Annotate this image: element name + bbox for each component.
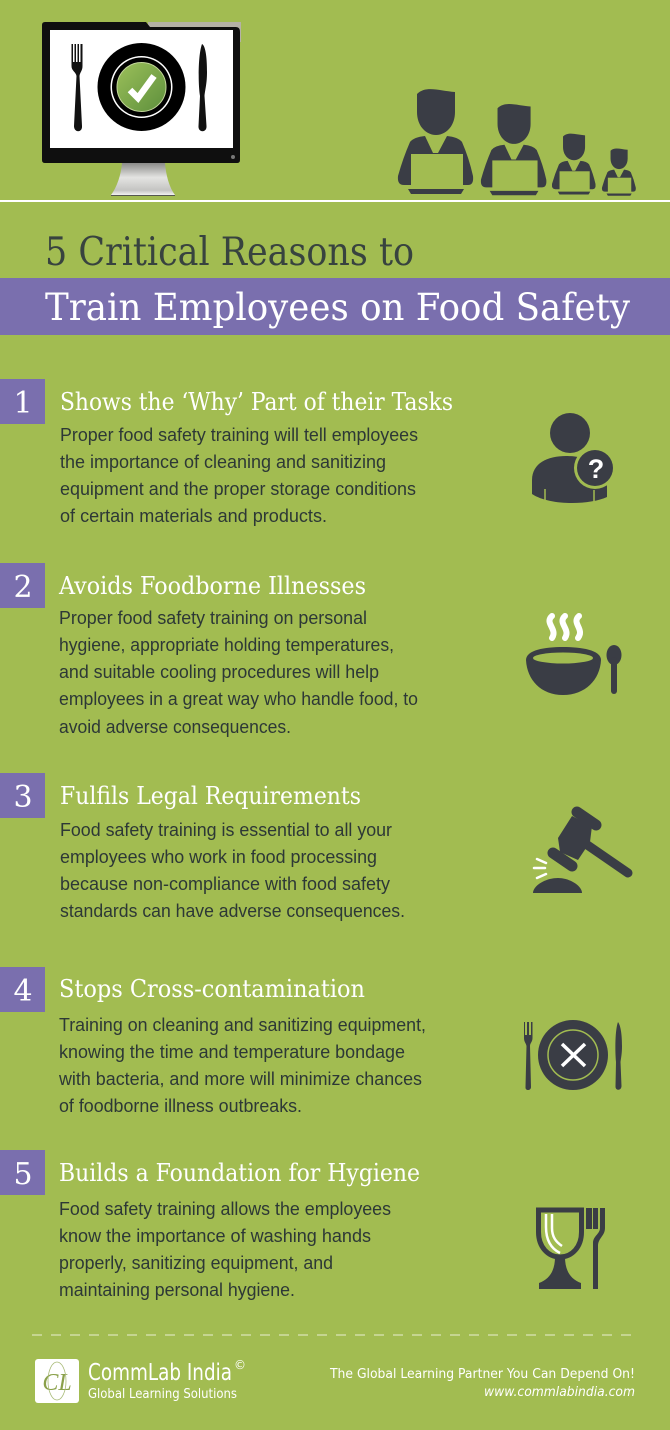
body text 2: hygiene, appropriate holding temperatures, (59, 635, 394, 655)
logo: CommLab India: CommLab India (88, 1360, 232, 1386)
panel: reason 1 (0, 379, 616, 526)
body text 5: Food safety training allows the employees (59, 1199, 391, 1219)
logo: CommLab India: © (234, 1358, 246, 1372)
employee 2 (481, 104, 546, 195)
panel: reason 4 (0, 967, 622, 1116)
icon: plate with cross, fork and knife (524, 1020, 622, 1090)
body text 3: because non-compliance with food safety (60, 874, 390, 894)
body text 2: and suitable cooling procedures will help (59, 662, 379, 682)
number badge 5 (0, 1150, 45, 1195)
body text 3: Food safety training is essential to all your (60, 820, 392, 840)
heading 4: Stops Cross-contamination (59, 975, 365, 1003)
number badge 2 (0, 563, 45, 608)
icon: knife (198, 44, 207, 131)
body text 3 (60, 820, 405, 921)
body text 3: employees who work in food processing (60, 847, 377, 867)
body text 4 (58, 1015, 426, 1116)
icon: four employees at laptops (398, 89, 636, 196)
body text 2: Proper food safety training on personal (59, 608, 367, 628)
panel: reason 3 (0, 773, 628, 921)
body text 2: avoid adverse consequences. (59, 717, 291, 737)
icon: gavel (533, 812, 628, 893)
icon: fork (72, 44, 82, 131)
number badge 4: 4 (13, 974, 33, 1009)
body text 4: knowing the time and temperature bondage (59, 1042, 405, 1062)
body text 5 (59, 1199, 391, 1300)
icon: steaming bowl and spoon (526, 616, 622, 695)
employee 3 (552, 134, 596, 194)
body text 5: maintaining personal hygiene. (59, 1280, 295, 1300)
logo: CommLab India: Global Learning Solutions (88, 1387, 237, 1402)
body text 4: Training on cleaning and sanitizing equipment, (59, 1015, 426, 1035)
heading 2: Avoids Foodborne Illnesses (58, 572, 366, 600)
body text 1: Proper food safety training will tell employees (60, 425, 418, 445)
employee 4 (602, 149, 636, 196)
icon: plate (98, 43, 186, 131)
body text 4: of foodborne illness outbreaks. (59, 1096, 302, 1116)
title banner: Train Employees on Food Safety (45, 286, 630, 329)
icon: glass and fork (538, 1208, 605, 1289)
body text 5: know the importance of washing hands (59, 1226, 371, 1246)
body text 1: of certain materials and products. (60, 506, 327, 526)
icon: person with question mark: ? (588, 454, 604, 484)
icon: person with question mark (532, 413, 616, 503)
body text 4: with bacteria, and more will minimize chances (58, 1069, 422, 1089)
body text 2: employees in a great way who handle food, to (59, 689, 418, 709)
number badge 3 (0, 773, 45, 818)
number badge 1 (0, 379, 45, 424)
icon: computer monitor with plate and check mark (42, 22, 241, 196)
footer tagline: www.commlabindia.com (484, 1385, 635, 1400)
footer tagline: The Global Learning Partner You Can Depend On! (329, 1367, 635, 1382)
title line 1: 5 Critical Reasons to (45, 230, 414, 275)
body text 3: standards can have adverse consequences. (60, 901, 405, 921)
body text 2 (59, 608, 418, 737)
logo: CommLab India (35, 1358, 246, 1403)
panel: reason 2 (0, 563, 622, 737)
body text 1: equipment and the proper storage conditions (60, 479, 416, 499)
heading 1: Shows the ‘Why’ Part of their Tasks (60, 388, 453, 416)
number badge 3: 3 (13, 780, 33, 815)
number badge 2: 2 (13, 570, 33, 605)
employee 1 (398, 89, 473, 194)
logo: CommLab India: CL (42, 1370, 72, 1396)
footer tagline (329, 1367, 635, 1400)
number badge 4 (0, 967, 45, 1012)
footer divider (32, 1334, 640, 1336)
heading 3: Fulfils Legal Requirements (60, 782, 361, 810)
body text 5: properly, sanitizing equipment, and (59, 1253, 333, 1273)
panel: reason 5 (0, 1150, 605, 1300)
number badge 5: 5 (13, 1157, 33, 1192)
body text 1: the importance of cleaning and sanitizing (60, 452, 386, 472)
body text 1 (60, 425, 418, 526)
title banner (0, 278, 670, 335)
number badge 1: 1 (13, 386, 33, 421)
heading 5: Builds a Foundation for Hygiene (59, 1159, 420, 1187)
